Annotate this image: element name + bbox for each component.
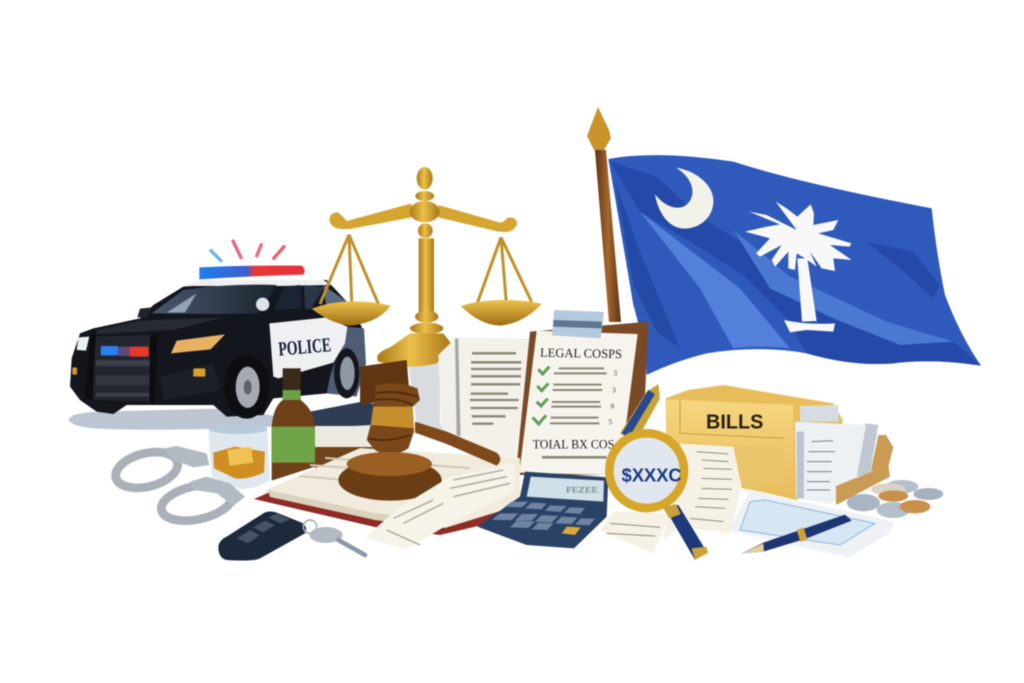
whiskey glass bbox=[208, 425, 270, 489]
clipboard clip bbox=[552, 310, 604, 338]
blue pen behind magnifier bbox=[620, 384, 660, 438]
grille and bumper bbox=[85, 334, 220, 403]
South Carolina flag bbox=[608, 155, 981, 375]
scale foot bbox=[377, 333, 452, 367]
checklist: 3 bbox=[612, 385, 616, 394]
roof light bar bbox=[199, 266, 305, 279]
calculator bbox=[477, 472, 608, 548]
cardboard tray bbox=[836, 435, 893, 505]
light rays bbox=[211, 241, 284, 261]
clipboard total line: TOIAL BX COS bbox=[533, 437, 614, 451]
handcuffs bbox=[112, 446, 245, 526]
receipts near magnifier bbox=[600, 443, 742, 553]
open document pages bbox=[438, 338, 529, 457]
right scale pan bbox=[461, 300, 542, 326]
calculator keys bbox=[492, 502, 595, 530]
bottle bbox=[272, 368, 315, 481]
gavel bbox=[338, 360, 500, 501]
windshield bbox=[152, 285, 277, 314]
checklist: 3 bbox=[613, 368, 617, 377]
police car bbox=[68, 241, 366, 430]
headlights bbox=[72, 334, 225, 377]
calculator display: FEZEE bbox=[566, 486, 598, 495]
open red book bbox=[254, 448, 520, 535]
fountain pen bbox=[742, 515, 852, 553]
stacked books behind gavel bbox=[308, 402, 392, 470]
car key fob and key bbox=[218, 511, 365, 561]
scale column bbox=[410, 167, 443, 334]
magnifying glass bbox=[609, 433, 708, 560]
long receipt on book bbox=[365, 463, 515, 549]
bills folder bbox=[600, 384, 943, 560]
flag folds bbox=[610, 162, 981, 366]
gavel head bbox=[367, 383, 420, 455]
flag pole bbox=[587, 107, 621, 322]
scale beam bbox=[329, 203, 517, 232]
grille lights bbox=[101, 346, 149, 357]
clipboard heading: LEGAL COSPS bbox=[540, 346, 622, 361]
gavel sound block bbox=[338, 459, 442, 501]
checklist: 5 bbox=[609, 418, 613, 427]
side windows bbox=[274, 285, 324, 310]
tucked documents bbox=[795, 405, 878, 504]
POLICE lettering: POLICE bbox=[278, 334, 332, 361]
BILLS label: BILLS bbox=[706, 410, 763, 433]
icon: palmetto tree bbox=[745, 202, 852, 332]
mirrors bbox=[137, 298, 269, 317]
coins bbox=[847, 480, 943, 518]
open document back pages bbox=[408, 355, 458, 438]
left scale pan bbox=[312, 301, 391, 326]
door panel bbox=[269, 317, 347, 378]
icon: crescent moon bbox=[655, 168, 713, 229]
clipboard: legal costs bbox=[516, 310, 648, 475]
wheels bbox=[224, 348, 359, 419]
magnified amount: $XXXC bbox=[622, 465, 682, 486]
checklist: 8 bbox=[611, 401, 615, 410]
checklist bbox=[533, 367, 617, 427]
blank check document bbox=[728, 491, 894, 557]
scale chains bbox=[320, 235, 532, 309]
balance scales bbox=[312, 167, 542, 367]
gavel handle bbox=[415, 422, 500, 466]
